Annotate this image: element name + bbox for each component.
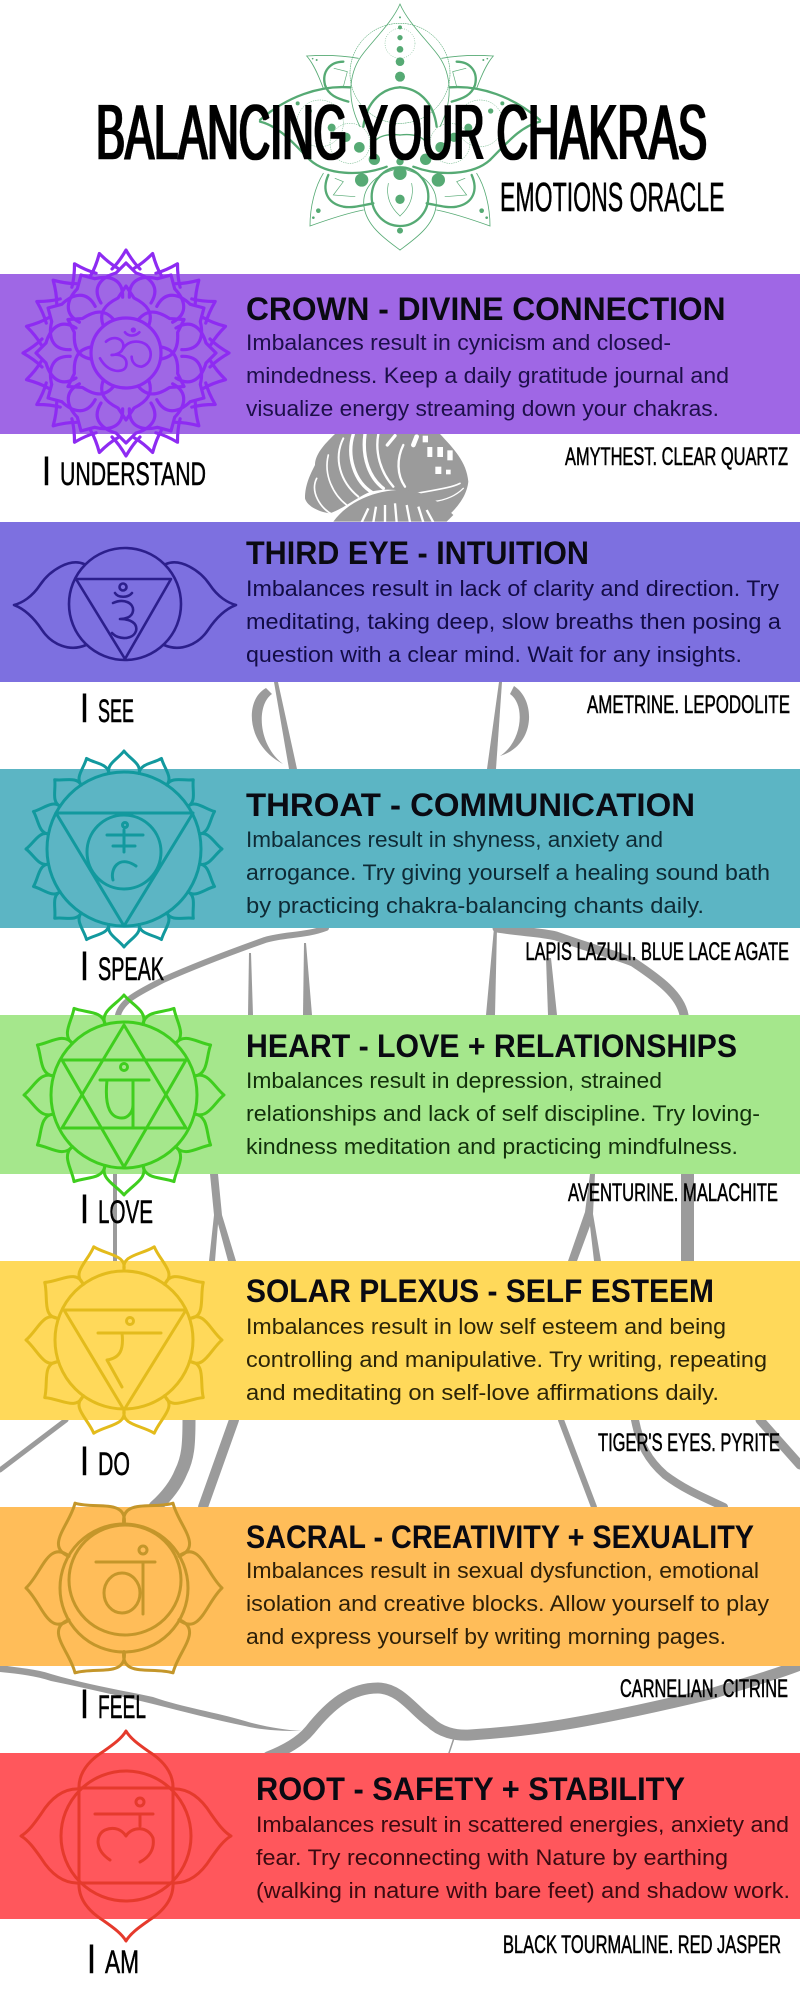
logo: green lotus mandala [260, 4, 540, 250]
panel: throat [0, 751, 800, 989]
ears and neck [252, 682, 529, 769]
description [246, 576, 781, 667]
panel: crown [0, 250, 800, 494]
description: mindedness. Keep a daily gratitude journal and [246, 363, 729, 388]
description: meditating, taking deep, slow breaths then posing a [246, 609, 781, 634]
mantra label [87, 1936, 139, 1982]
panel: solar plexus [0, 1240, 800, 1484]
mantra label [80, 1681, 146, 1727]
mantra label: AM [105, 1944, 139, 1980]
description: Imbalances result in depression, strained [246, 1068, 662, 1093]
icon: sacral chakra [26, 1485, 222, 1691]
icon: root chakra [21, 1731, 231, 1941]
panel: sacral [0, 1485, 800, 1727]
heading: THROAT - COMMUNICATION [246, 787, 695, 823]
icon: crown chakra [23, 250, 229, 456]
description [246, 330, 729, 421]
heading: ROOT - SAFETY + STABILITY [256, 1771, 685, 1807]
mantra label: I [80, 685, 89, 731]
heading: SOLAR PLEXUS - SELF ESTEEM [246, 1273, 714, 1309]
mantra label: LOVE [98, 1194, 153, 1230]
mantra label: I [80, 943, 89, 989]
description: isolation and creative blocks. Allow yourself to play [246, 1591, 770, 1616]
mantra label [80, 1186, 153, 1232]
mantra label: FEEL [98, 1689, 146, 1725]
hair bun [305, 434, 468, 522]
icon: throat chakra [26, 751, 222, 947]
icon: third eye chakra [14, 548, 236, 660]
panel: heart [0, 995, 800, 1232]
description: kindness meditation and practicing mindfulness. [246, 1134, 738, 1159]
mantra label: I [80, 1186, 89, 1232]
shoulders and collar [118, 928, 684, 1015]
description: Imbalances result in shyness, anxiety and [246, 827, 663, 852]
description: arrogance. Try giving yourself a healing sound bath [246, 860, 770, 885]
description [246, 827, 770, 918]
description [246, 1314, 767, 1405]
description: and meditating on self-love affirmations daily. [246, 1380, 719, 1405]
panel: root [0, 1731, 800, 1982]
mantra label: I [87, 1936, 96, 1982]
mantra label: SPEAK [98, 951, 164, 987]
mantra label: I [80, 1681, 89, 1727]
description: (walking in nature with bare feet) and shadow work. [256, 1878, 790, 1903]
mantra label: UNDERSTAND [60, 456, 206, 492]
description: Imbalances result in low self esteem and being [246, 1314, 726, 1339]
waist and arms [0, 1420, 800, 1507]
description: Imbalances result in cynicism and closed- [246, 330, 671, 355]
heading: CROWN - DIVINE CONNECTION [246, 291, 726, 327]
icon: solar plexus chakra [26, 1240, 222, 1440]
heading: HEART - LOVE + RELATIONSHIPS [246, 1028, 737, 1064]
description: relationships and lack of self discipline. Try loving- [246, 1101, 760, 1126]
torso lines [115, 1174, 694, 1261]
description: Imbalances result in sexual dysfunction, emotional [246, 1558, 759, 1583]
description: visualize energy streaming down your chakras. [246, 396, 719, 421]
description: Imbalances result in lack of clarity and direction. Try [246, 576, 780, 601]
description [256, 1812, 790, 1903]
mantra label [80, 943, 164, 989]
mantra label: DO [98, 1446, 130, 1482]
mantra label: I [42, 448, 51, 494]
description [246, 1068, 760, 1159]
heading: SACRAL - CREATIVITY + SEXUALITY [246, 1519, 754, 1555]
hips curve [0, 1665, 800, 1757]
mantra label: I [80, 1438, 89, 1484]
description: by practicing chakra-balancing chants daily. [246, 893, 704, 918]
body figure outline in grey [0, 434, 800, 1757]
description [246, 1558, 770, 1649]
description: controlling and manipulative. Try writing, repeating [246, 1347, 767, 1372]
icon: heart chakra [24, 995, 224, 1195]
mantra label [80, 685, 134, 731]
description: Imbalances result in scattered energies, anxiety and [256, 1812, 789, 1837]
mantra label [80, 1438, 130, 1484]
mantra label [42, 448, 206, 494]
description: and express yourself by writing morning pages. [246, 1624, 726, 1649]
mantra label: SEE [98, 693, 134, 729]
panel: third eye [0, 522, 800, 731]
heading: THIRD EYE - INTUITION [246, 535, 589, 571]
description: fear. Try reconnecting with Nature by earthing [256, 1845, 728, 1870]
description: question with a clear mind. Wait for any insights. [246, 642, 742, 667]
